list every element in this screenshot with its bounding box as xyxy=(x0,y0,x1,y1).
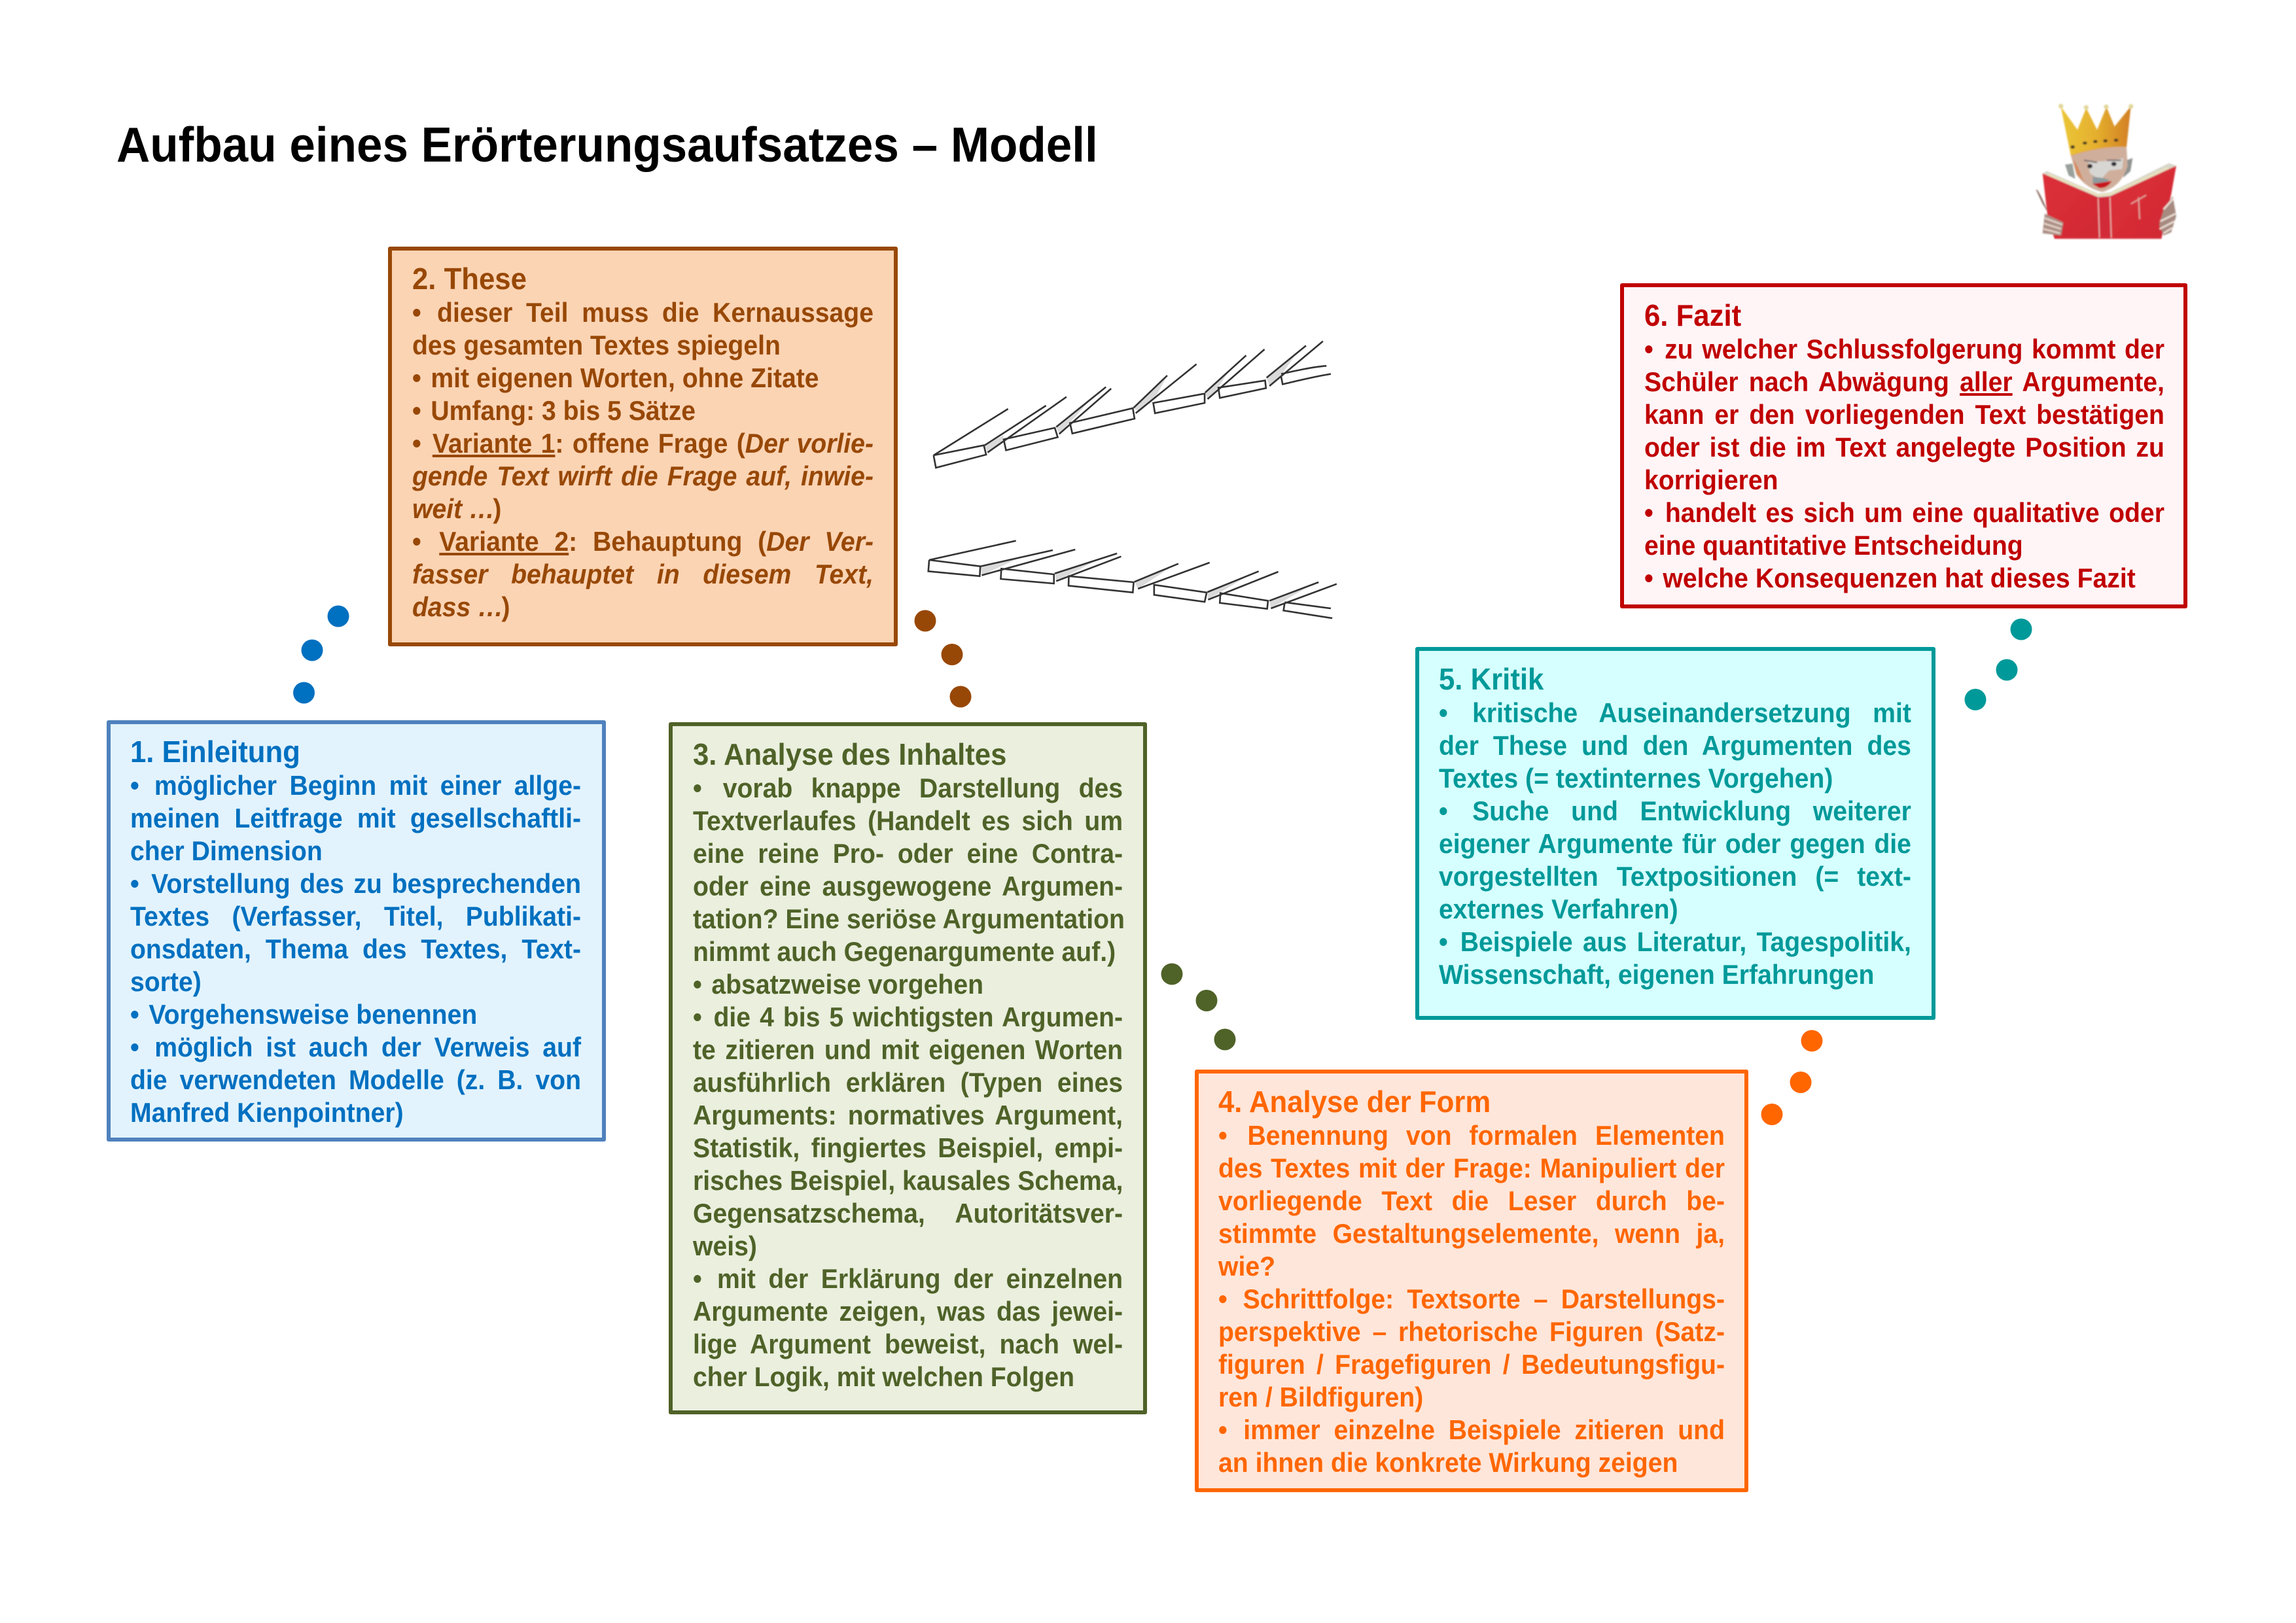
text block: Kritik: externes Verfahren) xyxy=(1439,894,1678,924)
text block: Kritik: • Beispiele aus Literatur, Tagespolitik, xyxy=(1439,926,1911,957)
text block: Fazit xyxy=(1644,298,2164,593)
text block: These: dass …) xyxy=(412,591,510,621)
text block: Einleitung: Manfred Kienpointner) xyxy=(130,1096,404,1128)
panel: 5. Kritik xyxy=(1415,647,1935,1020)
panel: 2. These xyxy=(388,247,898,646)
heading: Fazit: 6. Fazit xyxy=(1644,298,1741,332)
text block: Analyse des Inhaltes: te zitieren und mit eigenen Worten xyxy=(693,1034,1123,1065)
text block: Analyse des Inhaltes: • die 4 bis 5 wichtigsten Argumen- xyxy=(693,1001,1123,1032)
text block: Einleitung: • Vorstellung des zu besprechenden xyxy=(130,867,581,899)
text block: Fazit: • welche Konsequenzen hat dieses Fazit xyxy=(1644,563,2135,593)
heading: These: 2. These xyxy=(412,262,527,296)
text block: These: • Variante 2: Behauptung (Der Ver- xyxy=(412,526,874,556)
text block: These: des gesamten Textes spiegeln xyxy=(412,330,781,360)
title: Aufbau eines Erörterungsaufsatzes – Modell xyxy=(116,117,1098,172)
text block: Kritik: • Suche und Entwicklung weiterer xyxy=(1439,795,1911,826)
illustration: upward staircase sketch xyxy=(933,340,1331,469)
text block: Einleitung: Textes (Verfasser, Titel, Publikati- xyxy=(130,900,581,932)
text block: Analyse der Form: • Benennung von formalen Elementen xyxy=(1218,1120,1725,1150)
text block: Einleitung: die verwendeten Modelle (z. B. von xyxy=(130,1064,581,1095)
text block: Analyse des Inhaltes: • mit der Erklärung der einzelnen xyxy=(693,1263,1123,1294)
text block: Analyse der Form: • immer einzelne Beispiele zitieren und xyxy=(1218,1414,1725,1444)
connector dots: steps 5 to 6 xyxy=(1964,619,2032,710)
text block: Analyse des Inhaltes: Gegensatzschema, Autoritätsver- xyxy=(693,1197,1123,1229)
text block: Analyse des Inhaltes: tation? Eine seriöse Argumentation xyxy=(693,903,1125,934)
text block: Analyse der Form: wie? xyxy=(1218,1251,1275,1281)
text block: Einleitung: cher Dimension xyxy=(130,835,323,866)
text block: Kritik: Wissenschaft, eigenen Erfahrungen xyxy=(1439,959,1874,990)
text block: Fazit: oder ist die im Text angelegte Position zu xyxy=(1644,432,2164,462)
text block: Kritik xyxy=(1439,662,1911,990)
text block: These: • mit eigenen Worten, ohne Zitate xyxy=(412,362,819,393)
text block: Analyse des Inhaltes: Arguments: normatives Argument, xyxy=(693,1099,1123,1130)
heading: Einleitung: 1. Einleitung xyxy=(130,734,300,768)
text block: Analyse des Inhaltes: cher Logik, mit welchen Folgen xyxy=(693,1361,1074,1392)
text block: These xyxy=(412,262,874,621)
text block: Analyse des Inhaltes: ausführlich erklären (Typen eines xyxy=(693,1066,1123,1098)
connector dots: steps 3 to 4 xyxy=(1161,963,1235,1051)
text block: Analyse des Inhaltes xyxy=(692,737,1125,1392)
text block: Einleitung: • Vorgehensweise benennen xyxy=(130,998,477,1030)
text block: Einleitung: onsdaten, Thema des Textes, Text- xyxy=(130,933,581,964)
text block: Einleitung: • möglich ist auch der Verweis auf xyxy=(130,1031,581,1062)
panel: 1. Einleitung xyxy=(107,720,606,1142)
connector dots: steps 2 to 3 xyxy=(915,610,971,708)
text block: Analyse des Inhaltes: nimmt auch Gegenargumente auf.) xyxy=(693,935,1116,967)
text block: Einleitung xyxy=(130,734,581,1128)
text block: Analyse des Inhaltes: eine reine Pro- oder eine Contra- xyxy=(693,837,1123,869)
text block: Analyse des Inhaltes: lige Argument beweist, nach wel- xyxy=(693,1328,1123,1359)
text block: Fazit: • handelt es sich um eine qualitative oder xyxy=(1644,497,2164,527)
text block: Einleitung: meinen Leitfrage mit gesellschaftli- xyxy=(130,802,581,833)
panel: 3. Analyse des Inhaltes xyxy=(669,722,1146,1414)
text block: These: • dieser Teil muss die Kernaussage xyxy=(412,297,874,327)
text block: Fazit: • zu welcher Schlussfolgerung kommt der xyxy=(1644,334,2164,364)
heading: Analyse des Inhaltes: 3. Analyse des Inhaltes xyxy=(693,737,1006,771)
text block: These: • Variante 1: offene Frage (Der vorlie- xyxy=(412,428,874,458)
text block: Fazit: kann er den vorliegenden Text bestätigen xyxy=(1644,399,2164,429)
text block: Analyse des Inhaltes: Argumente zeigen, was das jewei- xyxy=(693,1295,1123,1327)
text block: Analyse der Form: an ihnen die konkrete Wirkung zeigen xyxy=(1218,1447,1678,1477)
text block: Analyse des Inhaltes: Statistik, fingiertes Beispiel, empi- xyxy=(693,1132,1123,1163)
text block: Kritik: eigener Argumente für oder gegen die xyxy=(1439,828,1911,859)
text block: Analyse der Form: perspektive – rhetorische Figuren (Satz- xyxy=(1218,1316,1725,1346)
text block: Analyse der Form: des Textes mit der Frage: Manipuliert der xyxy=(1218,1153,1725,1183)
panel: 4. Analyse der Form xyxy=(1195,1070,1748,1492)
illustration: downward staircase sketch xyxy=(927,540,1337,619)
text block: Einleitung: • möglicher Beginn mit einer allge- xyxy=(130,769,581,801)
text block: Analyse des Inhaltes: oder eine ausgewogene Argumen- xyxy=(693,870,1123,901)
text block: Fazit: eine quantitative Entscheidung xyxy=(1644,530,2022,560)
text block: These: weit …) xyxy=(412,493,501,523)
text block: These: gende Text wirft die Frage auf, inwie- xyxy=(412,461,874,491)
text block: Kritik: vorgestellten Textpositionen (= text- xyxy=(1439,861,1911,892)
heading: Analyse der Form: 4. Analyse der Form xyxy=(1218,1085,1491,1119)
text block: Analyse des Inhaltes: risches Beispiel, kausales Schema, xyxy=(693,1164,1123,1196)
text block: Analyse des Inhaltes: • absatzweise vorgehen xyxy=(693,968,983,1000)
text block: These: • Umfang: 3 bis 5 Sätze xyxy=(412,395,696,425)
text block: Kritik: • kritische Auseinandersetzung mit xyxy=(1439,697,1911,728)
text block: Analyse der Form: vorliegende Text die Leser durch be- xyxy=(1218,1185,1725,1215)
panel: 6. Fazit xyxy=(1620,283,2187,608)
text block: Analyse der Form xyxy=(1218,1085,1725,1477)
text block: Fazit: Schüler nach Abwägung aller Argumente, xyxy=(1644,366,2164,396)
text block: Kritik: Textes (= textinternes Vorgehen) xyxy=(1439,763,1833,794)
connector dots: steps 1 to 2 xyxy=(293,606,349,704)
text block: Kritik: der These und den Argumenten des xyxy=(1439,730,1911,761)
text block: Analyse der Form: • Schrittfolge: Textsorte – Darstellungs- xyxy=(1218,1283,1725,1314)
heading: Kritik: 5. Kritik xyxy=(1439,662,1544,696)
text block: Analyse der Form: ren / Bildfiguren) xyxy=(1218,1382,1423,1412)
text block: Analyse des Inhaltes: • vorab knappe Darstellung des xyxy=(693,772,1123,803)
text block: These: fasser behauptet in diesem Text, xyxy=(412,559,874,589)
text block: Analyse der Form: figuren / Fragefiguren / Bedeutungsfigu- xyxy=(1218,1349,1725,1379)
text block: Analyse der Form: stimmte Gestaltungselemente, wenn ja, xyxy=(1218,1218,1725,1248)
text block: Fazit: korrigieren xyxy=(1644,464,1778,495)
text block: Analyse des Inhaltes: Textverlaufes (Handelt es sich um xyxy=(693,805,1123,836)
icon: king reading a red book xyxy=(2035,103,2178,240)
connector dots: steps 4 to 5 xyxy=(1761,1030,1823,1125)
text block: Analyse des Inhaltes: weis) xyxy=(693,1230,757,1261)
text block: Einleitung: sorte) xyxy=(130,966,202,997)
